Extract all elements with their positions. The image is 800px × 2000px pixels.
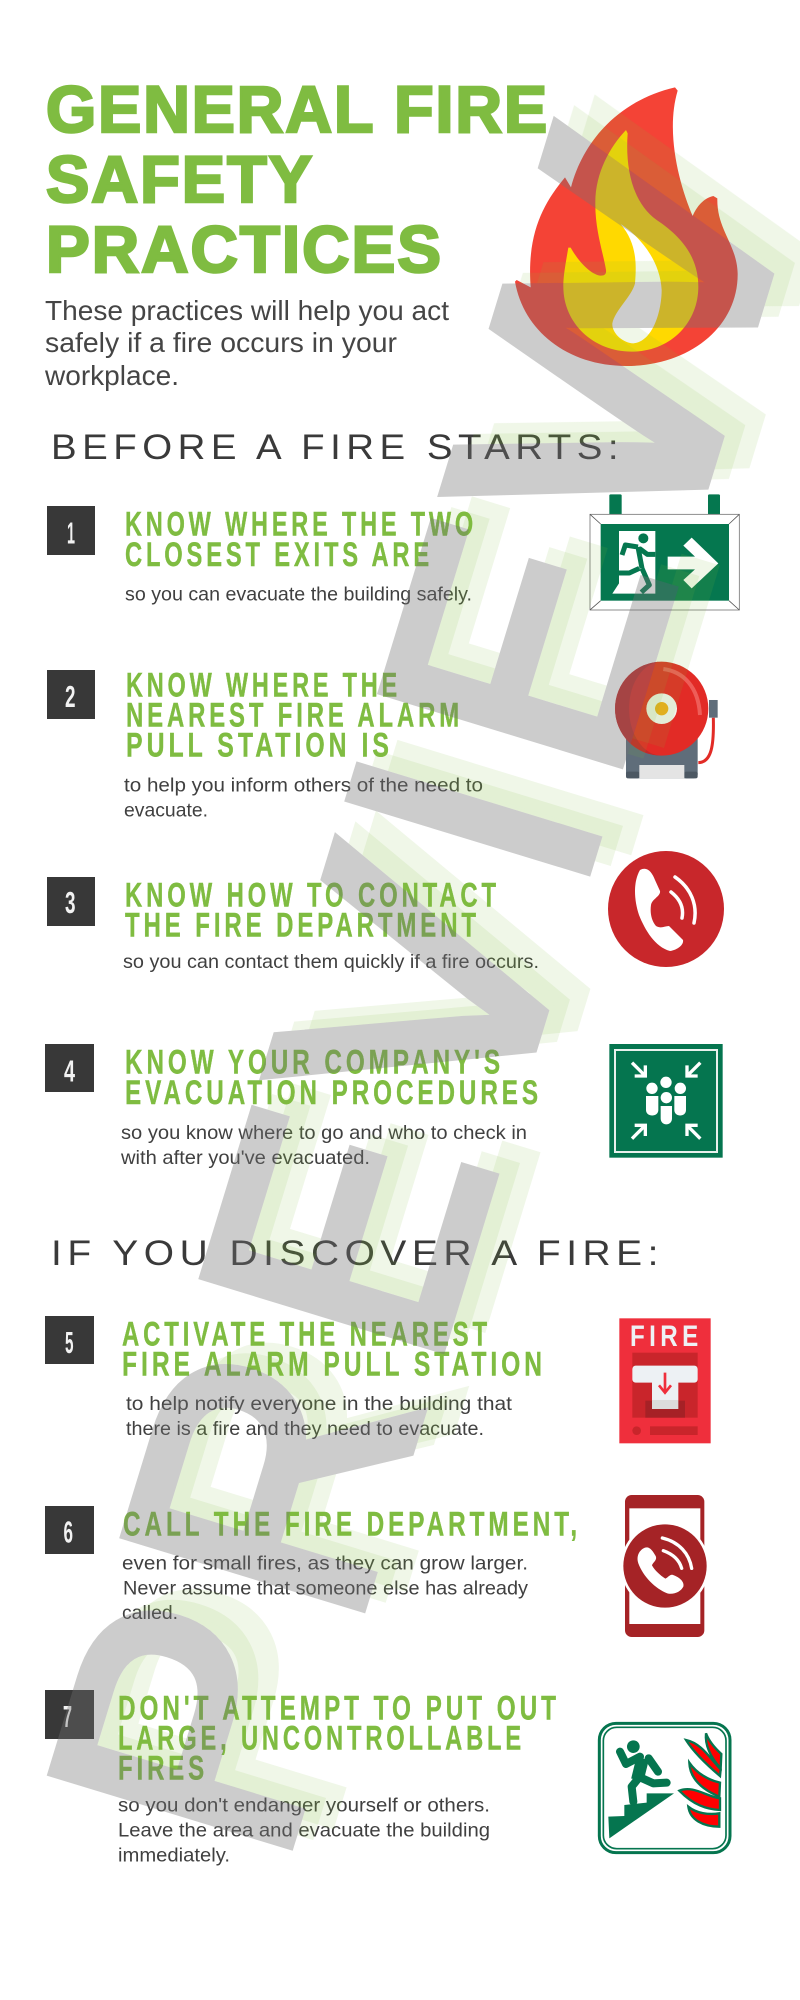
body 1: so you can evacuate the building safely. bbox=[125, 584, 472, 606]
icon: fire alarm bell bbox=[615, 662, 718, 778]
icon: exit sign bbox=[590, 494, 739, 610]
heading 7: LARGE, UNCONTROLLABLE bbox=[118, 1719, 525, 1757]
number badge 2: 2 bbox=[65, 679, 76, 714]
heading: before a fire starts: BEFORE A FIRE STARTS: bbox=[51, 428, 624, 467]
body 7 bbox=[118, 1795, 490, 1867]
watermark: PREVIEW: V bbox=[215, 807, 666, 1157]
heading 5: FIRE ALARM PULL STATION bbox=[122, 1346, 546, 1384]
intro text: These practices will help you act bbox=[45, 295, 449, 326]
watermark: PREVIEW: I bbox=[270, 718, 675, 920]
number badge 2 bbox=[47, 670, 95, 719]
watermark: PREVIEW: E bbox=[125, 1070, 568, 1395]
heading 4 bbox=[125, 1043, 542, 1112]
body 7: immediately. bbox=[118, 1845, 230, 1867]
icon: person escaping fire on stairs bbox=[599, 1723, 730, 1853]
body 5 bbox=[126, 1393, 513, 1440]
watermark: PREVIEW: P bbox=[0, 1549, 439, 1881]
watermark: PREVIEW: E bbox=[324, 472, 768, 799]
icon: fire alarm pull station bbox=[619, 1318, 711, 1443]
title: PRACTICES bbox=[46, 212, 443, 286]
number badge 7 bbox=[45, 1690, 94, 1739]
body 6: Never assume that someone else has already bbox=[123, 1577, 528, 1599]
number badge 6: 6 bbox=[64, 1515, 73, 1550]
panel: step 4 bbox=[45, 1043, 723, 1169]
icon: assembly point sign bbox=[609, 1044, 723, 1158]
heading 3 bbox=[125, 877, 500, 945]
body 2: to help you inform others of the need to bbox=[124, 775, 483, 797]
heading 1: KNOW WHERE THE TWO bbox=[125, 506, 477, 544]
heading 5: ACTIVATE THE NEAREST bbox=[122, 1316, 491, 1354]
body 4: so you know where to go and who to check in bbox=[121, 1122, 527, 1144]
body 3: so you can contact them quickly if a fire occurs. bbox=[123, 951, 539, 973]
heading 7: DON'T ATTEMPT TO PUT OUT bbox=[118, 1689, 560, 1727]
watermark: PREVIEW: R bbox=[46, 1308, 496, 1654]
body 4 bbox=[120, 1122, 527, 1169]
number badge 4: 4 bbox=[64, 1054, 75, 1089]
title bbox=[46, 72, 549, 286]
number badge 6 bbox=[45, 1506, 94, 1554]
heading 2: NEAREST FIRE ALARM bbox=[126, 697, 463, 735]
watermark: PREVIEW: E bbox=[304, 483, 747, 810]
number badge 1 bbox=[47, 506, 95, 555]
heading 5 bbox=[122, 1316, 546, 1384]
body 4: with after you've evacuated. bbox=[120, 1147, 370, 1169]
watermark: PREVIEW: P bbox=[15, 1539, 460, 1870]
watermark: PREVIEW: I bbox=[290, 707, 696, 909]
panel: step 5 bbox=[45, 1316, 711, 1443]
body 5: there is a fire and they need to evacuate. bbox=[126, 1418, 484, 1440]
icon: red phone circle bbox=[608, 851, 724, 967]
heading 2 bbox=[126, 667, 463, 765]
heading 3: THE FIRE DEPARTMENT bbox=[125, 907, 480, 945]
heading 4: EVACUATION PROCEDURES bbox=[125, 1074, 542, 1112]
number badge 7: 7 bbox=[63, 1699, 72, 1734]
watermark: PREVIEW: R bbox=[67, 1297, 517, 1643]
icon: fire alarm pull station: FIRE bbox=[630, 1320, 703, 1353]
number badge 3: 3 bbox=[65, 885, 76, 920]
body 6 bbox=[122, 1552, 528, 1624]
heading 1: CLOSEST EXITS ARE bbox=[125, 536, 433, 574]
number badge 1: 1 bbox=[67, 516, 75, 550]
heading 6: CALL THE FIRE DEPARTMENT, bbox=[123, 1506, 581, 1544]
heading 2: PULL STATION IS bbox=[126, 727, 393, 765]
watermark: PREVIEW: R bbox=[87, 1286, 537, 1633]
number badge 4 bbox=[45, 1044, 94, 1092]
intro text: safely if a fire occurs in your bbox=[45, 327, 397, 358]
panel: step 7 bbox=[45, 1689, 730, 1867]
heading 7 bbox=[118, 1689, 560, 1787]
intro text bbox=[44, 295, 449, 391]
panel: step 3 bbox=[47, 851, 724, 973]
heading 3: KNOW HOW TO CONTACT bbox=[125, 877, 500, 915]
watermark: PREVIEW: E bbox=[345, 462, 788, 788]
intro text: workplace. bbox=[44, 360, 179, 391]
number badge 3 bbox=[47, 877, 95, 926]
watermark: PREVIEW: I bbox=[311, 696, 716, 898]
body 7: Leave the area and evacuate the building bbox=[118, 1820, 490, 1842]
watermark: PREVIEW: V bbox=[194, 818, 645, 1168]
panel: step 2 bbox=[47, 662, 718, 822]
number badge 5 bbox=[45, 1316, 94, 1364]
body 5: to help notify everyone in the building that bbox=[126, 1393, 513, 1415]
panel: step 1 bbox=[47, 494, 739, 610]
heading 4: KNOW YOUR COMPANY'S bbox=[125, 1043, 504, 1081]
body 2: evacuate. bbox=[124, 800, 208, 822]
body 2 bbox=[124, 775, 483, 822]
watermark: PREVIEW: E bbox=[146, 1060, 589, 1384]
watermark: PREVIEW: E bbox=[166, 1049, 609, 1373]
icon: flame bbox=[515, 87, 738, 366]
panel: step 6 bbox=[45, 1495, 709, 1637]
heading 1 bbox=[125, 506, 477, 574]
icon: mobile phone call bbox=[621, 1495, 709, 1637]
body 7: so you don't endanger yourself or others. bbox=[118, 1795, 490, 1817]
heading 2: KNOW WHERE THE bbox=[126, 667, 401, 705]
heading: if you discover a fire: IF YOU DISCOVER A FIRE: bbox=[51, 1234, 664, 1273]
title: GENERAL FIRE bbox=[46, 72, 549, 146]
title: SAFETY bbox=[46, 142, 314, 216]
body 6: even for small fires, as they can grow larger. bbox=[122, 1552, 528, 1574]
number badge 5: 5 bbox=[65, 1325, 74, 1360]
watermark: PREVIEW: V bbox=[235, 796, 686, 1146]
heading 7: FIRES bbox=[118, 1749, 208, 1787]
body 6: called. bbox=[122, 1602, 178, 1624]
